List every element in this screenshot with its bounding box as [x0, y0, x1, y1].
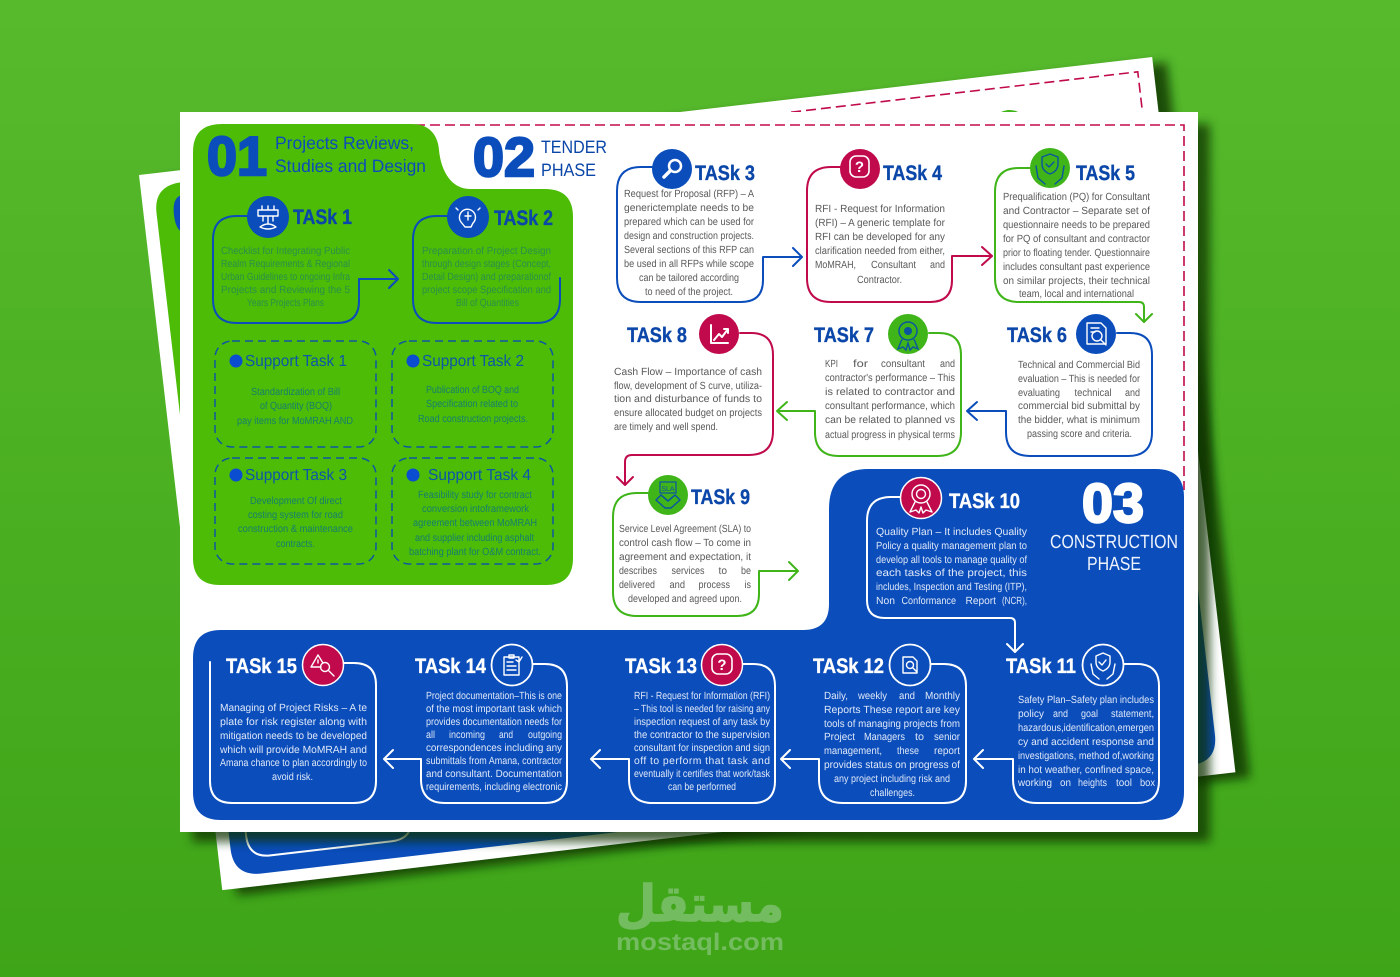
description: pay items for MoMRAH AND [237, 416, 353, 427]
arrow [591, 750, 600, 768]
title: TASk 4 [883, 162, 942, 185]
description: includes, Inspection and Testing (ITP), [876, 582, 1027, 593]
description: Urban Guidelines to ongoing Infra [221, 272, 350, 283]
description: Reports These report are key [824, 705, 961, 716]
description: heights [1078, 778, 1107, 789]
description: tool [1116, 778, 1132, 789]
title: TASk 5 [1076, 162, 1135, 185]
description: Non [876, 596, 895, 607]
dashed box [392, 458, 553, 564]
description: Publication of BOQ and [426, 385, 519, 396]
box and connector [969, 333, 1152, 456]
description: agreement and expectation, it [619, 552, 751, 563]
description: Several sections of this RFP can [624, 245, 754, 256]
icon: blueprint plant [247, 196, 289, 238]
description: describes [619, 566, 657, 577]
tender phase label: TENDER [541, 137, 607, 157]
description: and [1053, 709, 1068, 720]
back sheet [139, 55, 1250, 897]
description: tools of managing projects from [824, 719, 960, 730]
description: mitigation needs to be developed [220, 731, 367, 742]
arrow [384, 750, 393, 768]
arrow [793, 248, 802, 266]
description: Realm Requirements & Regional [221, 259, 350, 270]
main sheet [180, 112, 1198, 832]
description: and [899, 691, 915, 702]
description: Standardization of Bill [251, 387, 340, 398]
arrow [1136, 314, 1152, 322]
arrow [777, 402, 787, 420]
description: cy and accident response and [1018, 737, 1154, 748]
description: on [1060, 778, 1071, 789]
description: challenges. [870, 788, 915, 799]
description: correspondences including any [426, 743, 563, 754]
description: consultant [881, 359, 925, 370]
box and connector [975, 664, 1159, 803]
bullet [230, 354, 242, 368]
description: MoMRAH, [815, 260, 856, 271]
description [619, 524, 751, 605]
panel: phase 01 [193, 124, 573, 585]
arrow [389, 270, 398, 288]
description: delivered [619, 580, 655, 591]
number 02: 02 [473, 126, 535, 188]
description: all [426, 730, 435, 741]
description: developed and agreed upon. [628, 594, 742, 605]
description: investigations, method of,working [1018, 751, 1154, 762]
description: Road construction projects. [418, 414, 528, 425]
arrow [982, 247, 992, 265]
description: Technical and Commercial Bid [1018, 360, 1140, 371]
box and connector [613, 493, 796, 616]
description: – This tool is needed for raising any [634, 704, 771, 715]
description: is related to contractor and [825, 387, 955, 398]
icon: question bubble: ? [717, 657, 727, 674]
description: and Contractor – Separate set of [1003, 206, 1150, 217]
description: commercial bid submittal by [1018, 401, 1141, 412]
description: services [672, 566, 704, 577]
arrow [967, 402, 977, 420]
description: and [499, 730, 513, 741]
task 8 [614, 314, 773, 485]
title: Support Task 1 [245, 353, 347, 370]
description: requirements, including electronic [426, 782, 562, 793]
task 5 [995, 148, 1152, 322]
tender phase label: PHASE [541, 160, 596, 180]
description: clarification needed from either, [815, 246, 945, 257]
title: TASk 8 [627, 324, 687, 347]
task 3 [617, 149, 802, 302]
description: project scope Specification and [422, 285, 551, 296]
support task 2 [392, 341, 553, 447]
support task 3 [215, 458, 376, 564]
icon: SLA handshake: SLA [661, 486, 675, 493]
panel: phase 03 construction [193, 469, 1184, 820]
description: Managing of Project Risks – A te [220, 703, 367, 714]
description: batching plant for O&M contract. [409, 547, 541, 558]
description: to need of the project. [645, 287, 733, 298]
icon: shield and hands [1030, 148, 1070, 188]
description: team, local and international [1019, 289, 1134, 300]
description: and [670, 580, 685, 591]
description: outgoing [528, 730, 562, 741]
heading: projects reviews [275, 133, 426, 176]
description: generictemplate needs to be [624, 203, 754, 214]
description: through design stages (Concept, [422, 259, 551, 270]
dashed box [215, 341, 376, 447]
description [237, 387, 353, 427]
description [1017, 695, 1156, 789]
description: avoid risk. [272, 772, 313, 783]
title: TASk 13 [625, 655, 697, 678]
description: weekly [857, 691, 888, 702]
tender phase label [541, 137, 607, 180]
box and connector [592, 664, 775, 803]
title: TASk 7 [814, 324, 874, 347]
heading: projects reviews: Studies and Design [275, 156, 426, 176]
title: TASk 2 [494, 207, 553, 230]
icon: award badge [888, 314, 928, 354]
description: can be related to planned vs [825, 415, 955, 426]
description: (NCR), [1002, 596, 1027, 607]
description: Amana chance to plan accordingly to [220, 758, 367, 769]
dashed tender phase border [415, 125, 1184, 490]
watermark: مستقل [616, 875, 784, 933]
task 4 [807, 149, 992, 302]
title: Support Task 3 [245, 467, 347, 484]
description: questionnaire needs to be prepared [1003, 220, 1150, 231]
description: contracts. [276, 539, 315, 550]
description: of the most important task which [426, 704, 562, 715]
icon: question bubble [702, 644, 742, 686]
heading: phase 02 [473, 126, 607, 188]
description: to [718, 566, 727, 577]
description: consultant performance, which [825, 401, 955, 412]
title: Support Task 4 [428, 467, 531, 484]
description [614, 367, 762, 433]
description: RFI - Request for Information (RFI) [634, 691, 770, 702]
description: on similar projects, their technical [1003, 276, 1150, 287]
arrow [781, 750, 790, 768]
description: evaluating [1018, 388, 1060, 399]
title: TASk 1 [293, 206, 352, 229]
description: incoming [449, 730, 485, 741]
description: any project including risk and [834, 774, 950, 785]
description: Detail Design) and preparationof [422, 272, 551, 283]
description: Cash Flow – Importance of cash [614, 367, 762, 378]
title: TASk 12 [813, 655, 884, 678]
description: Checklist for Integrating Public [221, 246, 350, 257]
description: develop all tools to manage quality of [876, 555, 1027, 566]
title: TASk 10 [949, 490, 1020, 513]
bullet [406, 468, 420, 482]
description: for PQ of consultant and contractor [1003, 234, 1150, 245]
description: to [915, 732, 924, 743]
description [1018, 360, 1141, 440]
description: these [897, 746, 919, 757]
icon: shield and hands [1082, 644, 1124, 686]
description: which will provide MoMRAH and [219, 745, 367, 756]
back sheet: 01 [168, 178, 234, 246]
task 7 [777, 314, 961, 456]
description: in hot weather, confined space, [1018, 765, 1154, 776]
description: Development Of direct [250, 496, 342, 507]
description: Policy a quality management plan to [876, 541, 1027, 552]
description: control cash flow – To come in [619, 538, 751, 549]
description [409, 490, 541, 558]
title: TASk 14 [415, 655, 486, 678]
task 12 [781, 644, 966, 803]
description: Conformance [902, 596, 956, 607]
icon: line chart [699, 314, 739, 354]
box and connector [782, 664, 966, 803]
description: are timely and well spend. [614, 422, 718, 433]
description: each tasks of the project, this [876, 568, 1027, 579]
description: Safety Plan–Safety plan includes [1018, 695, 1154, 706]
description: passing score and criteria. [1027, 429, 1132, 440]
task 1 [213, 196, 398, 323]
description: consultant for inspection and sign [634, 743, 770, 754]
description: policy [1018, 709, 1045, 720]
description: tion and disturbance of funds to [614, 394, 762, 405]
description: and [1125, 388, 1140, 399]
panel background green [193, 124, 573, 585]
description: hazardous,identification,emergen [1018, 723, 1154, 734]
description [219, 703, 367, 783]
box outline [210, 662, 376, 803]
description: prior to floating tender. Questionnaire [1003, 248, 1150, 259]
box outline [413, 216, 560, 323]
watermark [616, 875, 784, 956]
description [824, 691, 961, 799]
description: Managers [864, 732, 905, 743]
description [238, 496, 353, 550]
description: Project documentation–This is one [426, 691, 562, 702]
description: RFI can be developed for any [815, 232, 946, 243]
box and connector [779, 333, 961, 456]
icon: magnifier [652, 149, 692, 189]
description [1003, 192, 1150, 300]
description: prepared which can be used for [624, 217, 754, 228]
description: flow, development of S curve, utiliza- [614, 381, 762, 392]
icon: risk warning magnifier [302, 644, 344, 686]
description: inspection request of any task by [634, 717, 771, 728]
icon: design gear [447, 196, 489, 238]
description: eventually it certifies that work/task [634, 769, 771, 780]
box and connector [995, 168, 1144, 321]
description: off to perform that task and [634, 756, 770, 767]
description [422, 246, 551, 309]
title: TASk 9 [691, 486, 750, 509]
description [426, 691, 563, 793]
dashed box [215, 458, 376, 564]
description: for [853, 359, 869, 370]
icon: report and magnifier [890, 644, 930, 686]
construction phase label [1050, 532, 1178, 575]
description [634, 691, 771, 793]
title: TASk 15 [226, 655, 297, 678]
description: be used in all RFPs while scope [624, 259, 754, 270]
icon: question bubble: ? [855, 159, 864, 176]
description: Report [966, 596, 996, 607]
description: provides documentation needs for [426, 717, 562, 728]
box and connector [625, 333, 773, 484]
description: box [1140, 778, 1156, 789]
description: plate for risk register along with [220, 717, 367, 728]
description: Monthly [925, 691, 961, 702]
description: includes consultant past experience [1003, 262, 1150, 273]
title: TASk 11 [1006, 655, 1076, 678]
icon: quality badge [900, 478, 942, 518]
icon: question bubble [840, 149, 880, 189]
description: technical [1074, 388, 1112, 399]
bullet [406, 354, 420, 368]
support task 4 [392, 458, 553, 564]
description: and supplier including asphalt [415, 533, 534, 544]
box and connector [807, 167, 990, 302]
description: senior [934, 732, 960, 743]
task 2 [413, 196, 560, 323]
description: costing system for road [248, 510, 343, 521]
box and connector [213, 216, 396, 323]
description: Request for Proposal (RFP) – A [624, 189, 754, 200]
description: Specification related to [426, 399, 518, 410]
description: is [744, 580, 751, 591]
title: TASk 6 [1007, 324, 1067, 347]
description: ensure allocated budget on projects [614, 408, 762, 419]
bullet [230, 468, 242, 482]
title: Support Task 2 [422, 353, 524, 370]
description [876, 527, 1028, 607]
description: Quality Plan – It includes Quality [876, 527, 1028, 538]
description: construction & maintenance [238, 524, 353, 535]
description: the contractor to the supervision [634, 730, 770, 741]
box and connector [617, 167, 800, 302]
description: conversion intoframework [422, 504, 530, 515]
description: KPI [825, 359, 838, 370]
task 6 [967, 314, 1152, 456]
task 14 [384, 644, 567, 803]
description: and consultant. Documentation [426, 769, 562, 780]
description: contractor's performance – This [825, 373, 955, 384]
description: design and construction projects. [624, 231, 754, 242]
description: actual progress in physical terms [825, 430, 955, 441]
arrow [617, 477, 633, 485]
heading: projects reviews: Projects Reviews, [275, 133, 414, 153]
description: evaluation – This is needed for [1018, 374, 1140, 385]
number 01: 01 [207, 125, 267, 187]
task 9 [613, 475, 798, 616]
box and connector [867, 497, 1015, 651]
description: Years Projects Plans [247, 298, 324, 309]
description: and [940, 359, 955, 370]
panel background blue [193, 469, 1184, 820]
description: statement, [1111, 709, 1154, 720]
description: RFI - Request for Information [815, 204, 945, 215]
description: can be performed [668, 782, 736, 793]
description: goal [1081, 709, 1098, 720]
description: agreement between MoMRAH [413, 518, 537, 529]
watermark: mostaql.com [616, 929, 784, 956]
description: Daily, [824, 691, 848, 702]
description: the bidder, what is minimum [1018, 415, 1140, 426]
box and connector [385, 664, 567, 803]
arrow [1007, 644, 1023, 652]
task 15 [210, 644, 376, 803]
description: process [698, 580, 730, 591]
number 03: 03 [1082, 472, 1144, 534]
description [418, 385, 528, 425]
description: (RFI) – A generic template for [815, 218, 946, 229]
description: Contractor. [857, 275, 902, 286]
support task 1 [215, 341, 376, 447]
description: provides status on progress of [824, 760, 960, 771]
description: Prequalification (PQ) for Consultant [1003, 192, 1150, 203]
construction phase label: CONSTRUCTION [1050, 532, 1178, 553]
description: be [741, 566, 751, 577]
title: TASk 3 [695, 162, 755, 185]
description [221, 246, 350, 309]
description: can be tailored according [639, 273, 739, 284]
description [815, 204, 946, 286]
icon: document and magnifier [1076, 314, 1116, 354]
description [624, 189, 754, 298]
description: Service Level Agreement (SLA) to [619, 524, 751, 535]
description: Consultant [871, 260, 916, 271]
description: of Quantity (BOQ) [260, 401, 332, 412]
description: and [930, 260, 945, 271]
description: Projects and Reviewing the 5 [221, 285, 350, 296]
description: Preparation of Project Design [422, 246, 551, 257]
task 10 [867, 478, 1028, 652]
dashed box [392, 341, 553, 447]
description: Feasibility study for contract [418, 490, 532, 501]
description: management, [824, 746, 882, 757]
description: Project [824, 732, 855, 743]
icon: clipboard [492, 644, 532, 686]
description: report [934, 746, 960, 757]
description: Bill of Quantities [456, 298, 519, 309]
construction phase label: PHASE [1087, 554, 1141, 575]
task 13 [591, 644, 775, 803]
description: working [1017, 778, 1052, 789]
description: submittals from Amana, contractor [426, 756, 562, 767]
task 11 [974, 644, 1159, 803]
main sheet shadow [192, 124, 1210, 842]
arrow [974, 750, 983, 768]
icon: SLA handshake [648, 475, 688, 515]
arrow [789, 562, 798, 580]
description [825, 359, 955, 441]
